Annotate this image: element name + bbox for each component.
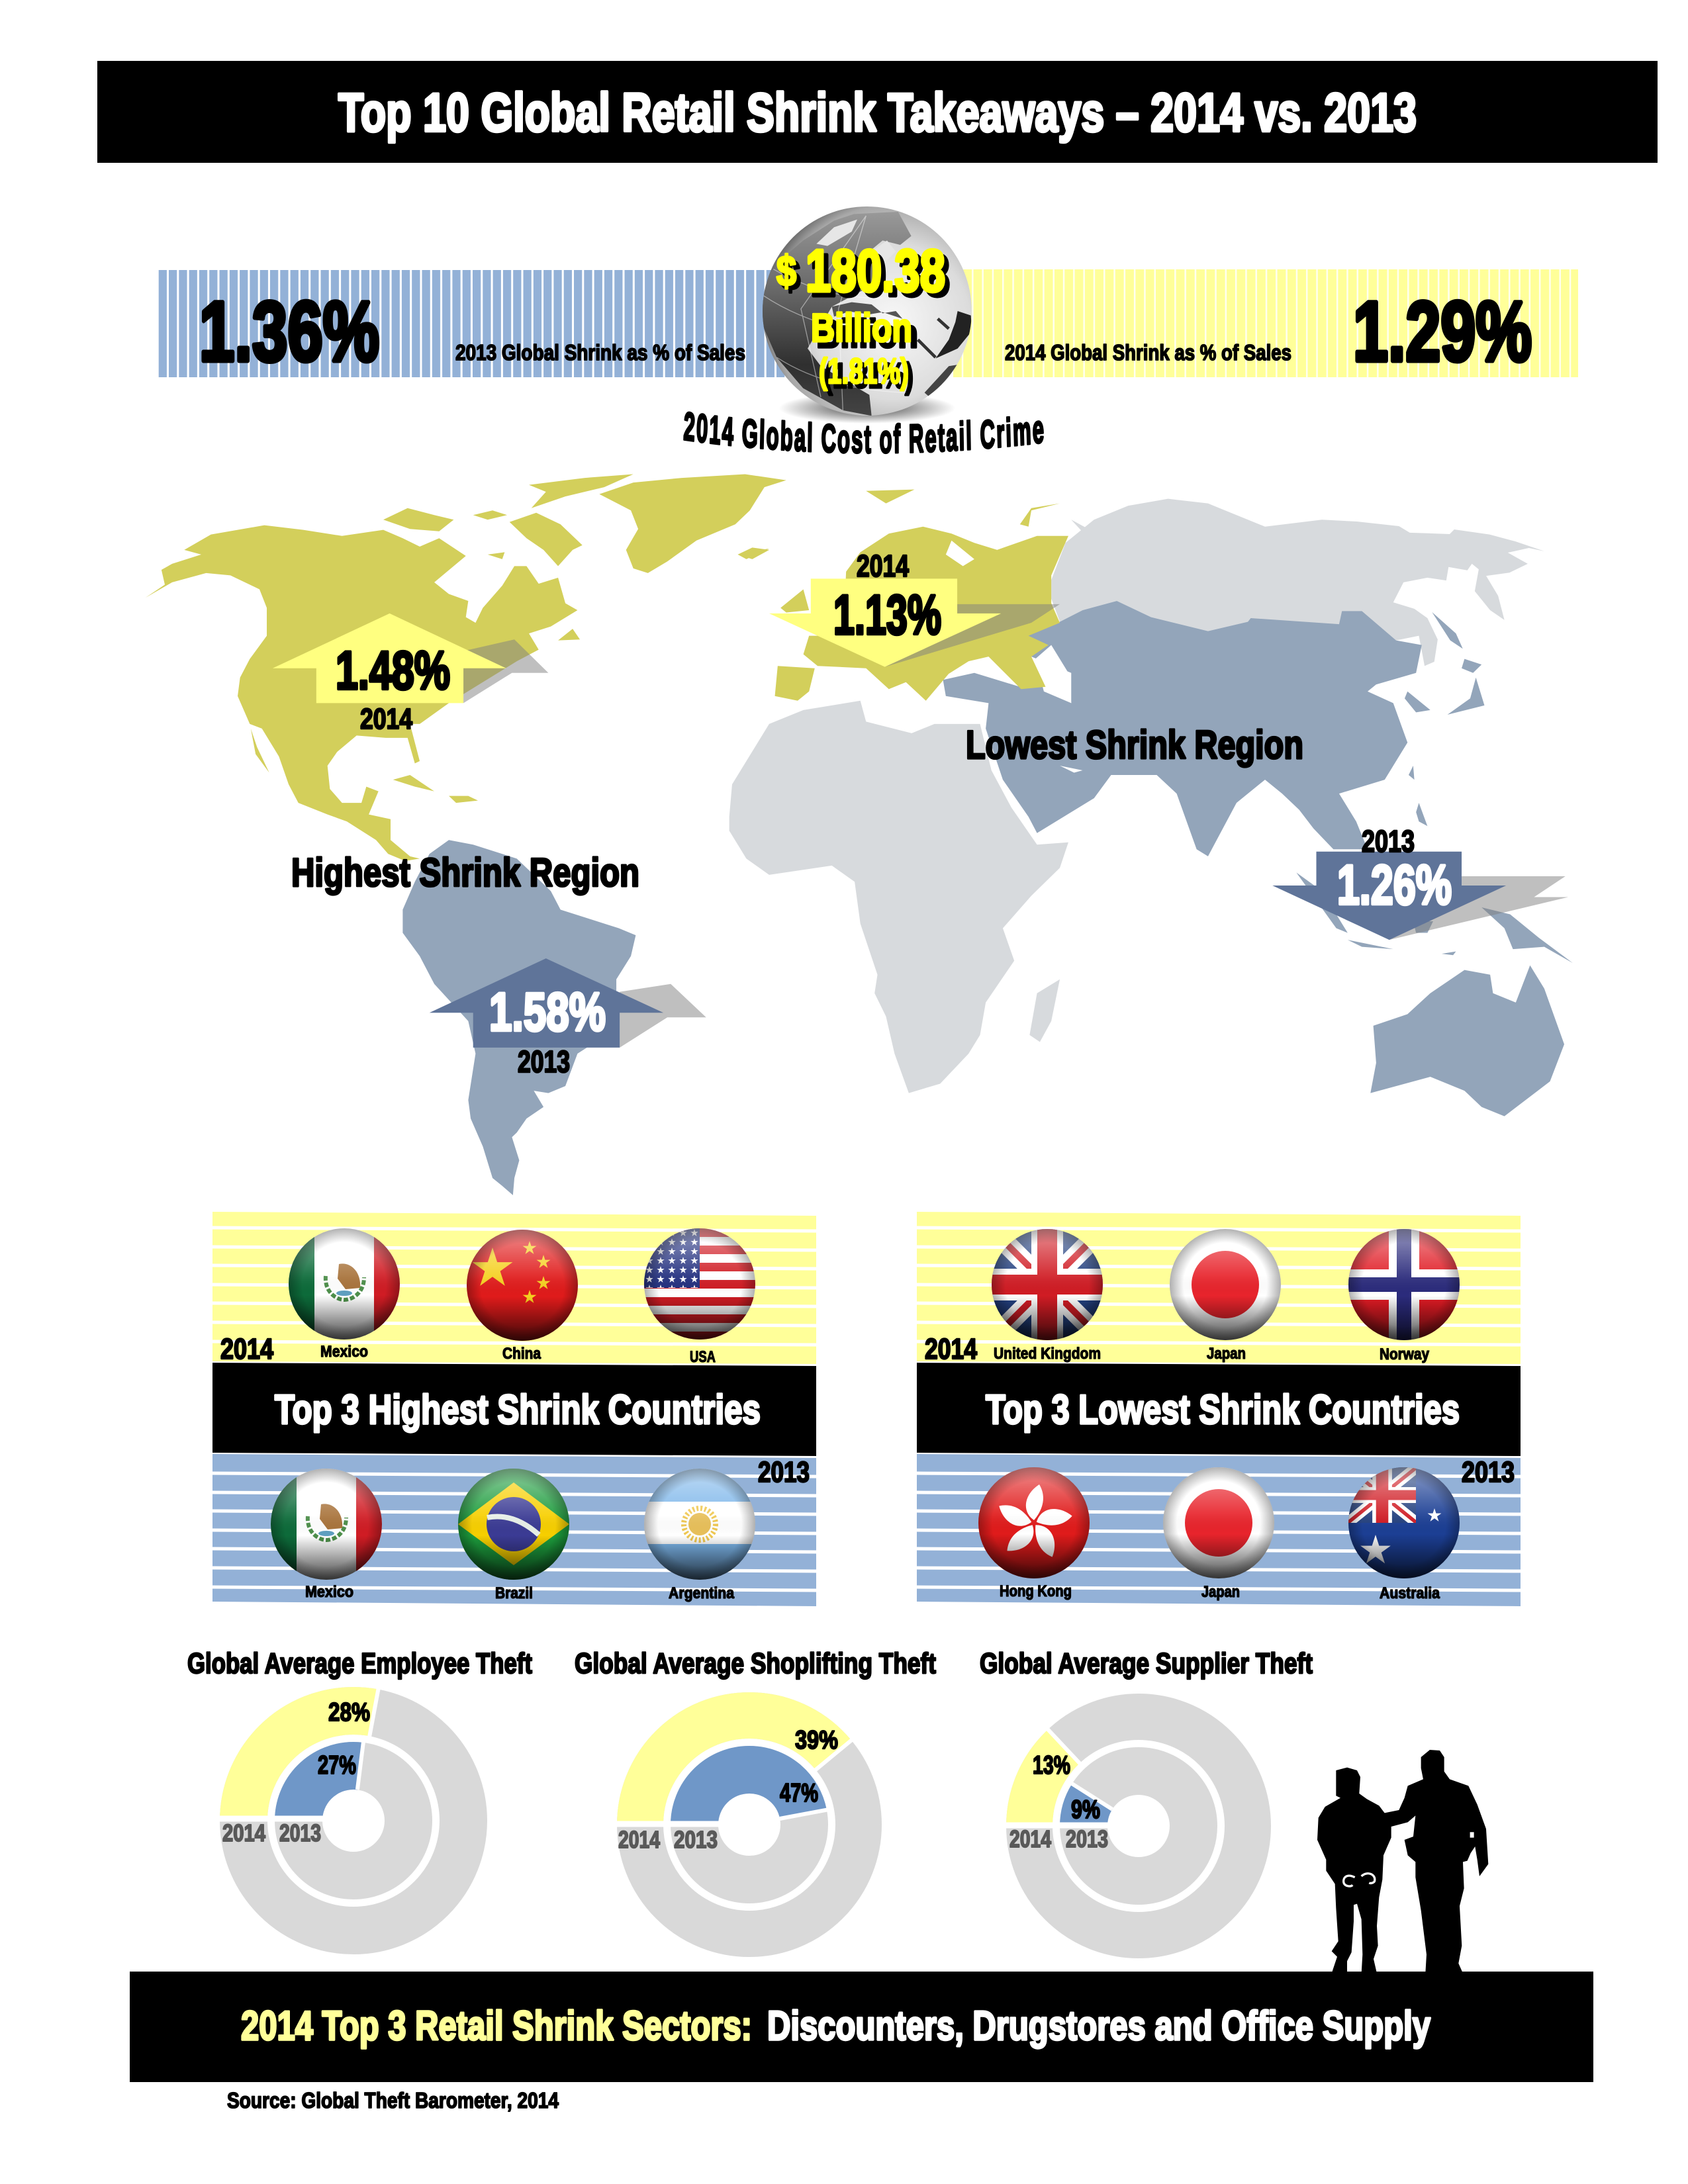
2013 striped band <box>212 1454 816 1606</box>
map: Americas <box>146 474 786 1195</box>
chart: supplier theft donut <box>980 1647 1313 1935</box>
source note: Source: Global Theft Barometer, 2014 <box>227 2088 559 2113</box>
panel: top 3 highest shrink countries <box>212 1212 816 1606</box>
flag: Argentina <box>644 1469 755 1580</box>
footer bar <box>130 1972 1593 2082</box>
label: United Kingdom: United Kingdom <box>994 1345 1101 1363</box>
North America <box>146 474 786 861</box>
callout: 2013 lowest region arrow: 1.26% <box>1337 854 1452 916</box>
2013 percentage: 1.36% <box>199 285 379 379</box>
flag: Mexico 2013 <box>271 1469 382 1580</box>
chart: shoplifting theft donut <box>575 1647 936 1934</box>
sectors list: Discounters, Drugstores and Office Supply <box>767 2003 1430 2049</box>
chart: supplier theft donut: 13% <box>1033 1751 1070 1780</box>
label: Brazil: Brazil <box>495 1584 533 1602</box>
2014 striped band <box>917 1212 1521 1364</box>
panel: top 3 lowest shrink countries <box>917 1212 1521 1606</box>
label: Australia: Australia <box>1380 1584 1440 1602</box>
globe headline: cost: (1.81%) <box>819 351 909 391</box>
flag: Australia <box>1345 1465 1460 1578</box>
heading: lowest shrink region: Lowest Shrink Region <box>966 723 1303 767</box>
chart: employee theft donut: 28% <box>328 1698 370 1727</box>
callout: 2014 lowest region arrow: 2014 <box>857 549 909 583</box>
flag: Mexico 2014 <box>289 1228 400 1340</box>
globe headline: cost: 180.38 <box>810 243 950 309</box>
globe headline: cost: (1.81%) <box>824 356 914 396</box>
2013 striped band <box>917 1454 1521 1606</box>
chart: shoplifting theft donut: 47% <box>780 1779 818 1807</box>
icon: globe <box>761 206 972 424</box>
panel: global shrink band <box>158 269 1578 379</box>
labels: 2014 <box>1009 1825 1051 1852</box>
chart: supplier theft donut: 9% <box>1071 1796 1100 1824</box>
label: USA: USA <box>690 1348 716 1366</box>
chart title: Global Average Employee Theft <box>187 1647 532 1680</box>
globe headline: cost: $ <box>776 247 796 295</box>
2014 label: 2014 Global Shrink as % of Sales <box>1005 340 1291 365</box>
globe headline: cost <box>776 238 950 396</box>
2014 band <box>953 269 1578 377</box>
callout: 2013 lowest region arrow: 2013 <box>1362 824 1415 858</box>
flag: United Kingdom <box>988 1225 1107 1344</box>
chart: shoplifting theft donut: 2013 <box>674 1826 718 1853</box>
labels: 2014 <box>618 1826 660 1853</box>
globe headline: cost: 180.38 <box>806 238 945 304</box>
chart: supplier theft donut: 2013 <box>1066 1825 1108 1852</box>
world map <box>146 474 1573 1195</box>
flag: Norway <box>1344 1225 1464 1344</box>
year 2014: 2014 <box>925 1333 977 1365</box>
flag: China <box>466 1229 579 1342</box>
Europe <box>738 490 1068 701</box>
Russia <box>1051 499 1544 666</box>
chart title: Global Average Shoplifting Theft <box>575 1647 936 1680</box>
label: Japan: Japan <box>1207 1345 1246 1363</box>
chart: shoplifting theft donut: 39% <box>795 1726 838 1754</box>
year 2014: 2014 <box>220 1333 273 1365</box>
black heading bar <box>212 1363 816 1456</box>
labels: 2014 <box>222 1819 265 1846</box>
black heading bar <box>917 1363 1521 1456</box>
2013 band <box>158 270 785 377</box>
label: Hong Kong: Hong Kong <box>1000 1582 1072 1600</box>
callout: 2013 highest region arrow: 2013 <box>518 1044 570 1079</box>
2014 striped band <box>212 1212 816 1364</box>
curved caption: 2014 Global Cost of Retail Crime <box>683 412 1044 454</box>
2013 label: 2013 Global Shrink as % of Sales <box>455 340 745 365</box>
callout: 2013 lowest region arrow <box>1272 824 1568 940</box>
callout: 2013 highest region arrow <box>430 958 706 1079</box>
heading text: Top 3 Highest Shrink Countries <box>275 1387 761 1433</box>
flag: Japan 2013 <box>1163 1467 1274 1578</box>
label: Norway: Norway <box>1380 1345 1430 1363</box>
chart: employee theft donut: 2013 <box>279 1819 321 1846</box>
globe headline: cost: Billion <box>816 312 918 356</box>
sectors label: 2014 Top 3 Retail Shrink Sectors: <box>241 2003 752 2049</box>
heading: highest shrink region: Highest Shrink Region <box>291 850 639 895</box>
label: Mexico: Mexico <box>320 1343 368 1361</box>
label: Argentina: Argentina <box>669 1584 735 1602</box>
year 2013: 2013 <box>758 1456 810 1488</box>
flag: USA <box>644 1228 755 1340</box>
chart: employee theft donut: 27% <box>318 1751 356 1780</box>
Africa <box>729 701 1068 1093</box>
year 2013: 2013 <box>1462 1456 1515 1488</box>
callout: 2014 highest region arrow <box>273 614 548 735</box>
flag: Brazil <box>458 1469 569 1580</box>
South America <box>402 840 635 1195</box>
flag: Hong Kong <box>978 1467 1090 1578</box>
flag: Japan 2014 <box>1170 1229 1281 1340</box>
label: Mexico: Mexico <box>305 1583 353 1601</box>
globe headline: cost: Billion <box>811 306 912 350</box>
chart title: Global Average Supplier Theft <box>980 1647 1313 1680</box>
callout: 2014 highest region arrow: 2014 <box>360 703 412 735</box>
2014 percentage: 1.29% <box>1353 285 1532 379</box>
chart: employee theft donut <box>187 1647 532 1931</box>
heading text: Top 3 Lowest Shrink Countries <box>986 1387 1460 1433</box>
callout: 2013 highest region arrow: 1.58% <box>489 982 606 1042</box>
callout: 2014 lowest region arrow: 1.13% <box>833 584 941 646</box>
Asia and Oceania <box>943 601 1573 1116</box>
callout: 2014 lowest region arrow <box>769 549 1060 667</box>
title bar <box>97 61 1658 163</box>
callout: 2014 highest region arrow: 1.48% <box>336 641 450 701</box>
icon: police officer and handcuffed suspect silhouette <box>1317 1750 1488 1974</box>
label: China: China <box>502 1345 541 1363</box>
globe headline: cost: $ <box>780 251 800 298</box>
map: Africa, Asia, Oceania <box>729 490 1573 1116</box>
label: Japan: Japan <box>1201 1583 1240 1601</box>
